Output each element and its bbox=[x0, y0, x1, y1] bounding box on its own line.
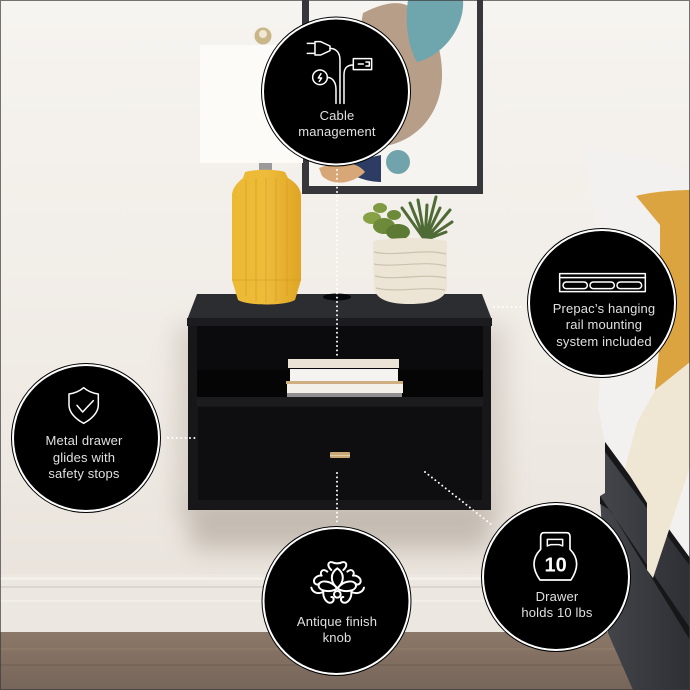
icon: kettlebell 10: 10 bbox=[545, 554, 567, 576]
label: metal drawer glides: glides with bbox=[53, 450, 115, 465]
callout: cable management bbox=[262, 17, 410, 166]
bed frame bbox=[600, 442, 690, 690]
label: drawer weight: Drawer bbox=[536, 589, 578, 604]
label: cable management: management bbox=[298, 124, 376, 139]
wall shadow around nightstand bbox=[176, 325, 506, 520]
drawer front bbox=[198, 407, 482, 500]
cable grommet bbox=[323, 294, 351, 300]
leader dotted lines bbox=[168, 170, 523, 525]
nightstand body bbox=[188, 318, 491, 510]
nightstand top surface bbox=[187, 294, 492, 320]
nightstand bbox=[187, 294, 492, 510]
callout: antique knob bbox=[262, 526, 411, 676]
label: hanging rail: Prepac’s hanging bbox=[553, 301, 655, 316]
callout: hanging rail bbox=[528, 228, 676, 378]
white bedding bbox=[582, 145, 690, 560]
callout: drawer weight bbox=[482, 502, 630, 652]
callout: metal drawer glides bbox=[12, 364, 160, 512]
stacked books bbox=[286, 359, 403, 397]
antique knob bbox=[330, 452, 350, 458]
label: metal drawer glides: Metal drawer bbox=[46, 433, 122, 448]
wood floor bbox=[0, 632, 690, 690]
wall shadow under nightstand bbox=[190, 505, 490, 550]
table lamp bbox=[200, 28, 303, 304]
icon: mounting rail bbox=[560, 274, 645, 292]
label: hanging rail: rail mounting bbox=[566, 317, 642, 332]
baseboard bbox=[0, 574, 690, 632]
icon: ornamental flourish bbox=[311, 562, 364, 603]
icon: shield check bbox=[69, 388, 98, 423]
label: antique knob: knob bbox=[323, 630, 351, 645]
open shelf bbox=[197, 326, 483, 397]
yellow pillow bbox=[636, 190, 690, 390]
icon: plug and cables bbox=[307, 42, 372, 103]
icon: kettlebell 10 bbox=[534, 533, 577, 580]
label: metal drawer glides: safety stops bbox=[48, 466, 120, 481]
framed art bbox=[302, 0, 483, 194]
label: antique knob: Antique finish bbox=[297, 614, 377, 629]
label: drawer weight: holds 10 lbs bbox=[521, 605, 593, 620]
cream throw blanket bbox=[625, 362, 690, 578]
potted plant bbox=[363, 197, 452, 304]
label: hanging rail: system included bbox=[556, 334, 652, 349]
label: cable management: Cable bbox=[320, 108, 354, 123]
